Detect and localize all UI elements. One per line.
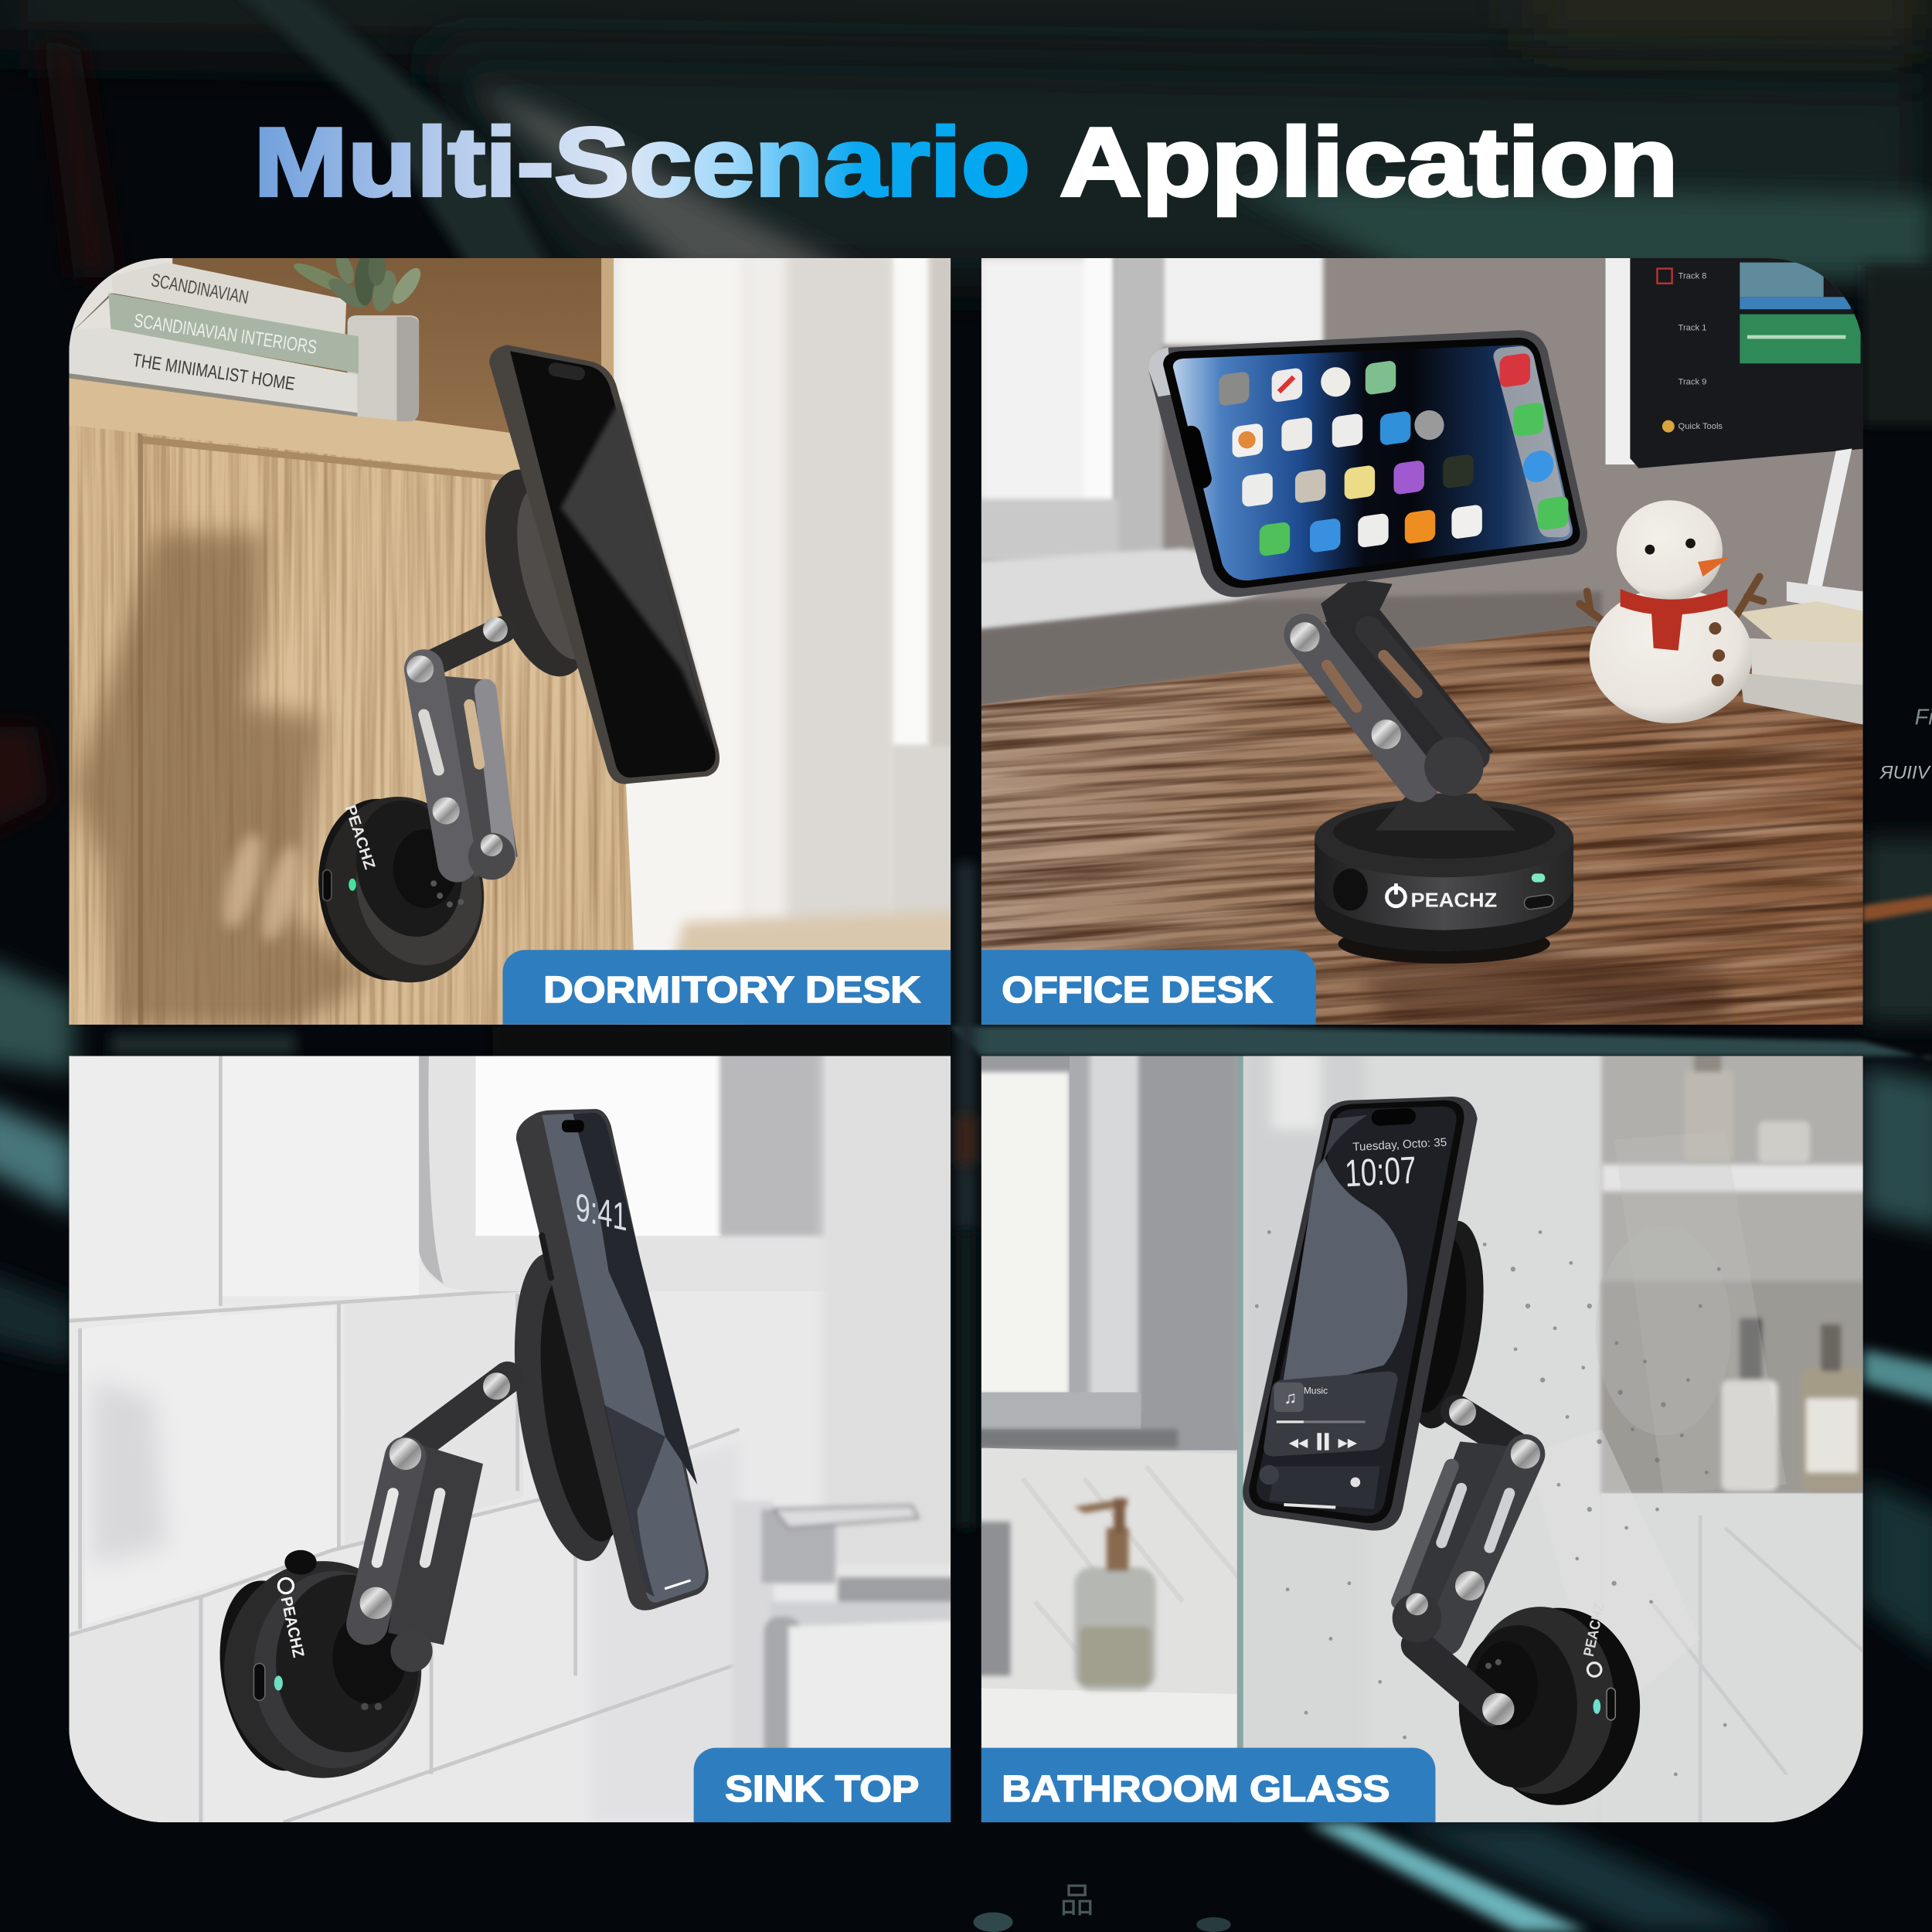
cabinet door with shadow	[69, 419, 637, 1029]
glass panel edge	[1237, 1056, 1243, 1824]
label: sink top	[694, 1748, 951, 1822]
magnetic ring behind phone	[1393, 1216, 1495, 1434]
suction base with brand mark	[1459, 1601, 1640, 1805]
suction base with brand mark	[206, 1550, 421, 1779]
desk stand base with brand mark	[1315, 794, 1573, 964]
phone front view with music lock screen: ▶▶	[1338, 1437, 1358, 1450]
label: bathroom glass: BATHROOM GLASS	[1002, 1769, 1389, 1810]
title: Multi-Scenario Application: Application	[1060, 107, 1679, 216]
soap dispenser	[1074, 1498, 1156, 1691]
suction base with brand mark	[318, 797, 484, 983]
stack of books: THE MINIMALIST HOME	[131, 350, 296, 395]
suction base with brand mark: PEACHZ	[277, 1595, 308, 1659]
wooden shelf back	[172, 258, 601, 433]
monitor with editing timeline: Track 9	[1679, 377, 1706, 386]
stack of books	[1740, 601, 1863, 725]
phone front view with music lock screen: ◀◀	[1289, 1437, 1308, 1450]
phone front view with music lock screen: ♫	[1284, 1388, 1297, 1407]
panel: office desk	[981, 258, 1863, 1025]
phone front view with music lock screen: Music	[1304, 1385, 1328, 1396]
title: Multi-Scenario Application: Multi-Scenario	[253, 107, 1030, 216]
suction base with brand mark: PEACHZ	[342, 803, 378, 872]
folding arm	[360, 1372, 510, 1672]
shelf board	[69, 375, 521, 474]
room background with window light	[69, 253, 961, 1041]
suction base with brand mark: PEACHZ	[1581, 1601, 1608, 1658]
potted plant	[291, 251, 426, 421]
title: Multi-Scenario Application	[253, 107, 1679, 216]
label: office desk: OFFICE DESK	[1002, 970, 1273, 1011]
ghost reflection on glass	[1528, 1131, 1787, 1725]
phone front view with music lock screen: 10:07	[1344, 1149, 1417, 1195]
bathroom background	[974, 1049, 1868, 1830]
chrome faucet and basin	[732, 1501, 955, 1827]
desk stand base with brand mark: PEACHZ	[1411, 888, 1497, 911]
panel: dormitory desk	[69, 251, 961, 1041]
phone showing home screen	[1148, 330, 1587, 597]
stack of books	[69, 263, 359, 417]
label: dormitory desk: DORMITORY DESK	[543, 970, 921, 1011]
label: office desk	[981, 950, 1316, 1026]
folding arm	[406, 617, 518, 879]
monitor with editing timeline: Quick Tools	[1679, 422, 1723, 431]
articulated arm	[1290, 579, 1493, 796]
knitted snowman	[1580, 500, 1764, 723]
label: sink top: SINK TOP	[725, 1769, 919, 1810]
tiled wall	[69, 1056, 951, 1824]
water droplets	[1255, 1230, 1727, 1776]
phone side view with lock screen	[516, 1109, 709, 1611]
label: bathroom glass	[981, 1748, 1435, 1822]
monitor with editing timeline	[1605, 253, 1866, 468]
label: dormitory desk	[503, 950, 951, 1026]
phone side view with lock screen: 9:41	[576, 1185, 628, 1240]
magnetic ring behind phone	[485, 470, 578, 677]
background: blurred car interior: ЯUIIV	[1879, 763, 1931, 784]
stack of books: SCANDINAVIAN INTERIORS	[132, 311, 318, 359]
phone with dark reflective screen	[489, 345, 719, 784]
panel: bathroom glass	[974, 1049, 1868, 1830]
desk with wood grain	[843, 529, 1932, 1122]
shelf bottles	[1685, 1049, 1863, 1491]
panel: sink top	[69, 1049, 958, 1827]
monitor with editing timeline: Track 8	[1679, 271, 1706, 281]
stack of books: SCANDINAVIAN	[149, 270, 250, 308]
phone front view with music lock screen: Tuesday, Octo: 35	[1352, 1136, 1447, 1154]
phone front view with music lock screen	[1243, 1097, 1478, 1530]
monitor with editing timeline: Track 1	[1679, 323, 1706, 332]
magnetic ring behind phone	[498, 1247, 638, 1568]
home screen app icons	[1219, 352, 1568, 556]
wall and window	[974, 253, 1863, 1026]
wall mirror	[419, 1049, 958, 1567]
monitor stand	[1787, 448, 1863, 614]
folding arm	[1393, 1399, 1540, 1725]
background: blurred car interior: 品	[1060, 1882, 1094, 1920]
